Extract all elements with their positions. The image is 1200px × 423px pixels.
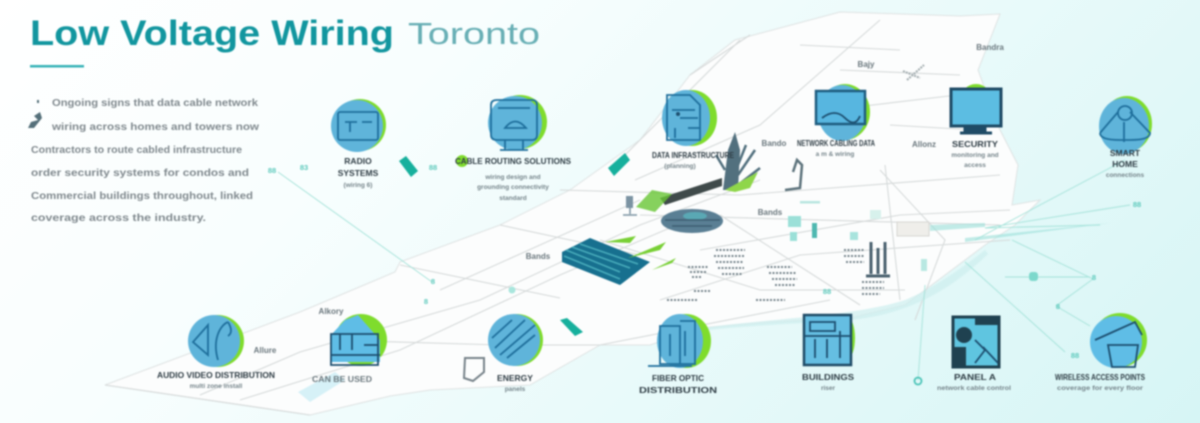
central technology illustration xyxy=(464,65,924,381)
panel: top item 6 xyxy=(1099,96,1152,179)
intro paragraph: Ongoing signs that data cable network xyxy=(52,98,258,109)
panel: bottom item 4 xyxy=(639,314,717,395)
small network nodes: 83 xyxy=(300,163,308,172)
small network nodes: 88 xyxy=(429,163,437,172)
title: Low Voltage Wiring xyxy=(30,14,394,53)
map place labels: Alkory xyxy=(319,307,344,316)
panel: bottom item 7: WIRELESS ACCESS POINTS xyxy=(1055,372,1145,382)
panel: top item 4: NETWORK CABLING DATA xyxy=(797,138,875,148)
map of Toronto xyxy=(105,12,1040,415)
map place labels: Bajy xyxy=(858,60,875,69)
small network nodes xyxy=(268,163,1141,384)
small network nodes: 8 xyxy=(424,297,428,306)
panel: top item 5 xyxy=(951,84,1001,169)
panel: top item 2 xyxy=(455,95,571,202)
panel: bottom item 4: DISTRIBUTION xyxy=(639,385,717,395)
panel: top item 1 xyxy=(331,99,386,189)
map place labels: Allonz xyxy=(912,140,936,149)
panel: bottom item 5 xyxy=(802,315,855,392)
panel: bottom item 5: riser xyxy=(821,385,836,392)
icon: building stack xyxy=(562,238,650,285)
panel: bottom item 7: coverage for every floor xyxy=(1057,385,1144,392)
map place labels: Allure xyxy=(254,346,277,355)
map place labels: Bands xyxy=(526,252,551,261)
intro paragraph: order security systems for condos and xyxy=(31,168,249,179)
intro paragraph: Commercial buildings throughout, linked xyxy=(31,191,253,202)
panel: bottom item 6 xyxy=(937,317,1011,392)
panel: bottom item 2 xyxy=(312,314,387,384)
panel: top item 5: SECURITY xyxy=(952,139,998,149)
panel: bottom item 3 xyxy=(488,314,543,393)
panel: bottom item 7 xyxy=(1055,313,1147,392)
intro paragraph: coverage across the industry. xyxy=(31,213,206,224)
map place labels: Bands xyxy=(758,208,783,217)
small network nodes: 88 xyxy=(1071,351,1079,360)
panel: top item 5: access xyxy=(964,162,986,169)
small network nodes: 88 xyxy=(1133,200,1141,209)
panel: bottom item 3: ENERGY xyxy=(497,373,533,383)
map place labels: Bando xyxy=(762,139,787,148)
panel: bottom item 3: panels xyxy=(505,386,526,393)
small network nodes: 8 xyxy=(1056,302,1060,311)
panel: bottom item 2: CAN BE USED xyxy=(312,375,372,384)
lake shoreline xyxy=(298,250,988,402)
panel: top item 3: (planning) xyxy=(664,163,696,170)
panel: top item 1: RADIO xyxy=(344,156,372,166)
panel: bottom item 6: PANEL A xyxy=(954,372,996,382)
panel: top item 1: (wiring 6) xyxy=(344,182,372,189)
icon: data hub xyxy=(661,209,723,233)
title: Toronto xyxy=(408,16,540,51)
panel: top item 4 xyxy=(797,84,875,158)
panel: top item 2: standard xyxy=(499,195,527,202)
panel: top item 3: DATA INFRASTRUCTURE xyxy=(652,150,734,160)
panel: top item 6: connections xyxy=(1106,172,1145,179)
icon: tree tower xyxy=(723,132,740,190)
title underline xyxy=(30,65,84,68)
small network nodes: 8 xyxy=(431,277,435,286)
panel: top item 2: grounding connectivity xyxy=(477,184,549,191)
panel: bottom item 5: BUILDINGS xyxy=(802,372,854,382)
icon: bullet leaf xyxy=(28,100,42,128)
icon: small devices xyxy=(626,196,633,208)
intro paragraph: Contractors to route cabled infrastructure xyxy=(31,145,242,156)
map place labels: Bandra xyxy=(976,43,1004,52)
panel: top item 6: HOME xyxy=(1112,159,1138,169)
panel: top item 3 xyxy=(652,90,734,170)
panel: top item 6: SMART xyxy=(1110,148,1141,158)
small network nodes: 88 xyxy=(268,166,276,175)
panel: bottom item 1 xyxy=(157,315,275,390)
panel: top item 5: monitoring and xyxy=(951,152,999,159)
intro paragraph xyxy=(31,98,259,224)
panel: bottom item 4: FIBER OPTIC xyxy=(652,373,704,383)
small network nodes: 8 xyxy=(1092,273,1096,282)
panel: top item 1: SYSTEMS xyxy=(338,168,379,178)
connector lines xyxy=(278,160,1130,380)
panel: bottom item 6: network cable control xyxy=(937,385,1011,392)
title xyxy=(30,14,540,53)
panel: bottom item 1: AUDIO VIDEO DISTRIBUTION xyxy=(157,370,275,380)
panel: top item 4: a m & wiring xyxy=(816,151,854,158)
panel: bottom item 1: multi zone install xyxy=(190,383,243,390)
panel: top item 2: CABLE ROUTING SOLUTIONS xyxy=(455,156,571,166)
intro paragraph: wiring across homes and towers now xyxy=(51,122,259,133)
map place labels xyxy=(254,43,1004,355)
panel: top item 2: wiring design and xyxy=(484,174,541,181)
small network nodes: 88 xyxy=(823,287,831,296)
green link glyphs xyxy=(399,153,630,336)
